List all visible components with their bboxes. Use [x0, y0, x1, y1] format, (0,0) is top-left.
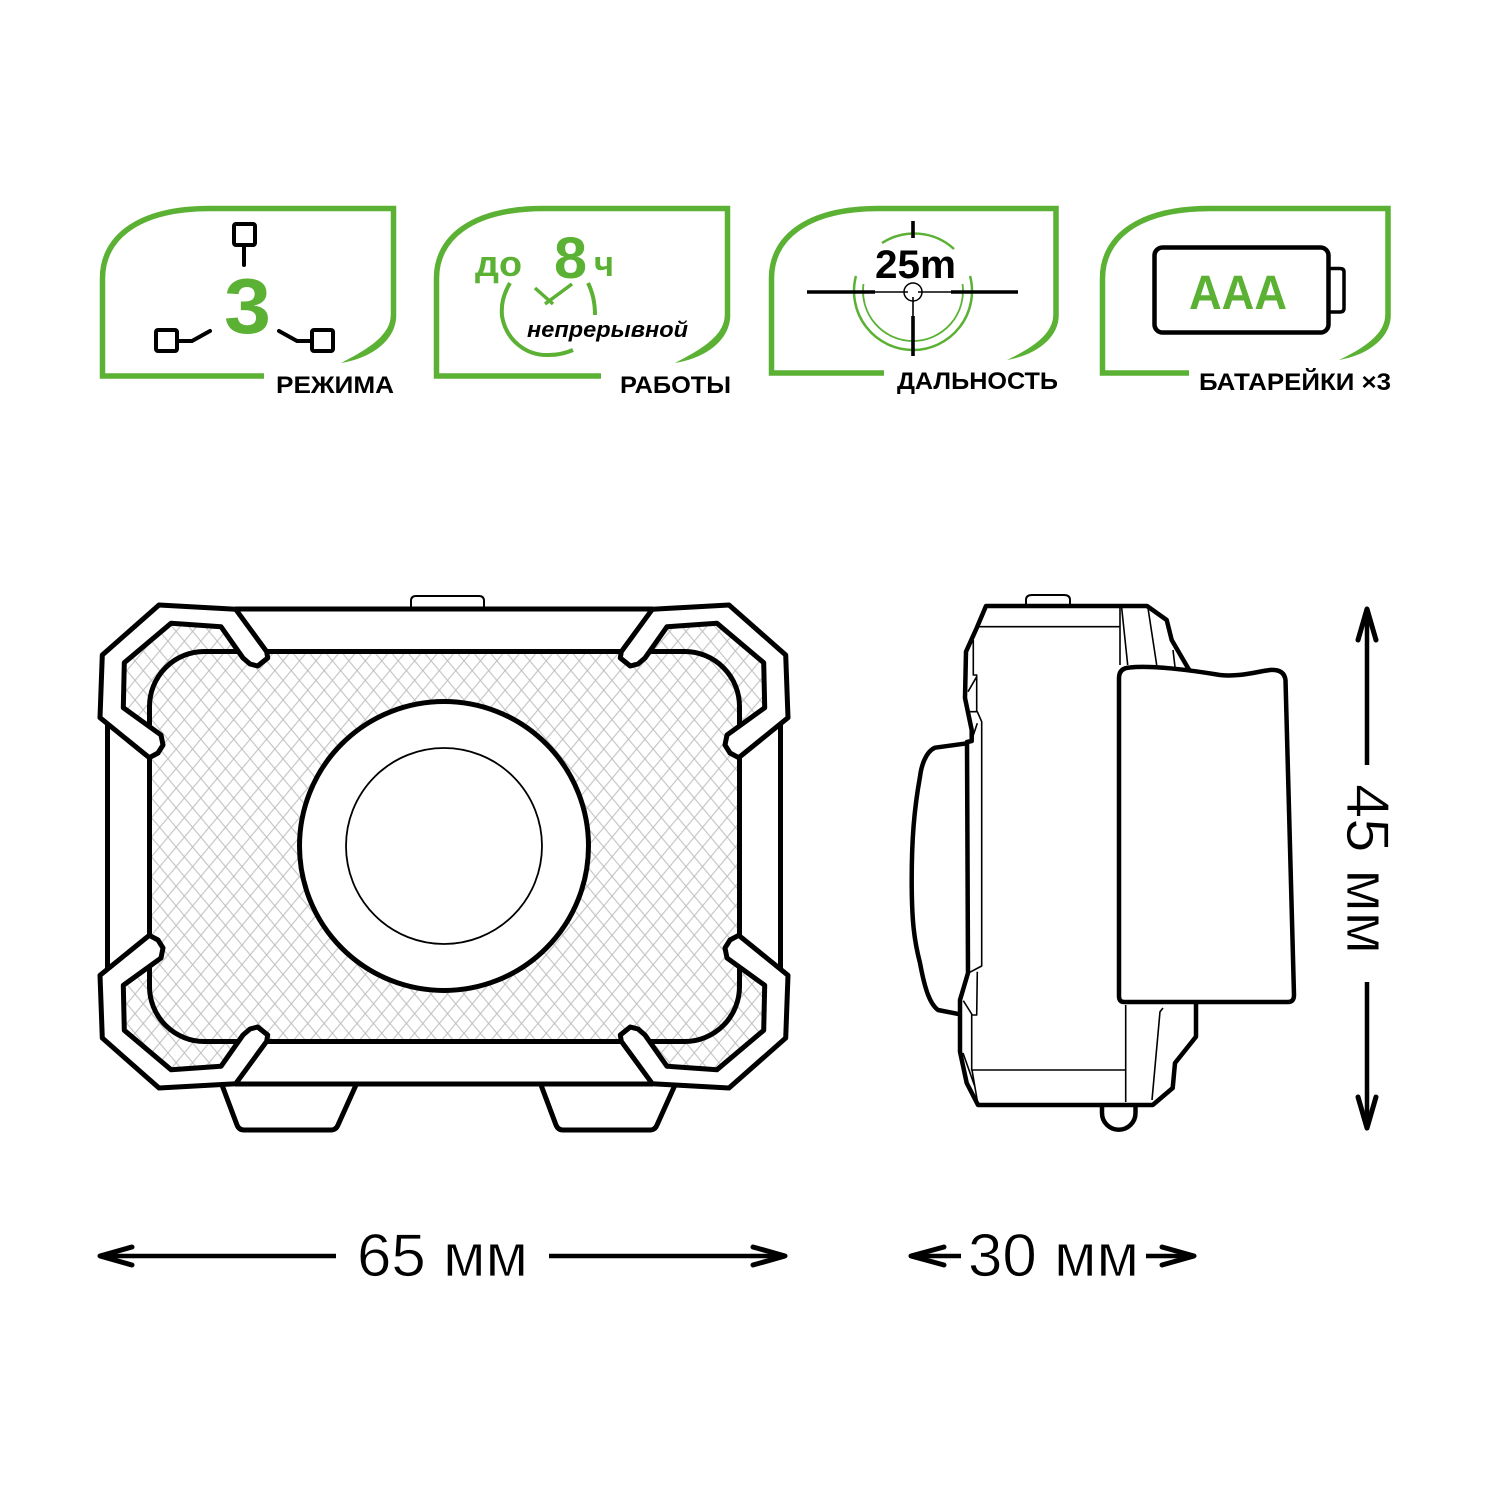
side view of headlamp — [912, 595, 1294, 1130]
text: up to: до — [475, 243, 522, 284]
label: runtime: РАБОТЫ — [620, 372, 731, 399]
panel frame: modes — [102, 208, 394, 376]
label: batteries x3: БАТАРЕЙКИ ×3 — [1199, 368, 1391, 396]
frame tail: batteries — [1339, 315, 1391, 360]
number: 3: 3 — [224, 262, 271, 350]
icon: mode switch top — [234, 224, 255, 265]
arrow down — [1358, 982, 1376, 1131]
panel frame: runtime — [436, 208, 728, 376]
mesh grille — [123, 623, 765, 1070]
panel: range — [772, 208, 1059, 395]
icon: crosshair target — [807, 221, 1018, 356]
panel frame: range — [772, 208, 1056, 373]
corner strap bottom left — [100, 935, 268, 1088]
hook bottom — [1102, 1105, 1136, 1130]
corner strap bottom right — [620, 935, 788, 1088]
arrow up — [1358, 606, 1376, 765]
lens — [346, 748, 542, 944]
arrow right — [549, 1247, 788, 1265]
icon: clock — [502, 283, 595, 355]
number: 8: 8 — [554, 226, 587, 291]
foot right — [541, 1085, 675, 1130]
text: AAA: AAA — [1189, 267, 1287, 320]
value 65 mm: 65 мм — [357, 1222, 528, 1289]
dimension: width 65 mm — [97, 1222, 788, 1289]
icon: mode switch left — [156, 330, 210, 351]
strap band side — [1119, 667, 1294, 1002]
foot left — [222, 1085, 356, 1130]
value 30 mm: 30 мм — [968, 1222, 1139, 1289]
panel: batteries — [1102, 208, 1391, 396]
frame tail: range — [1007, 315, 1059, 360]
button top — [411, 596, 484, 608]
label: modes: РЕЖИМА — [276, 372, 394, 399]
text: 25m: 25m — [875, 243, 956, 287]
panel: 3 modes — [102, 208, 396, 399]
icon: mode switch right — [279, 330, 333, 351]
arrow right — [1146, 1247, 1197, 1265]
arrow left — [908, 1247, 961, 1265]
frame tail: runtime — [675, 315, 730, 363]
dimension: height 45 mm — [1334, 606, 1401, 1131]
value 45 mm: 45 мм — [1334, 784, 1401, 954]
dimension: depth 30 mm — [908, 1222, 1197, 1289]
side body outline — [960, 606, 1196, 1105]
dome lens side — [912, 743, 972, 1014]
label: range: ДАЛЬНОСТЬ — [897, 368, 1058, 395]
lens bezel — [300, 702, 588, 990]
faceplate outline — [150, 652, 740, 1042]
frame tail: modes — [341, 315, 396, 363]
corner strap top right — [620, 605, 788, 758]
side body inner detail lines — [963, 607, 1175, 1103]
text: continuous: непрерывной — [527, 317, 689, 342]
text: hours: ч — [594, 243, 614, 284]
button top side — [1026, 595, 1070, 604]
corner strap top left — [100, 605, 268, 758]
front view of headlamp — [100, 596, 788, 1130]
panel: runtime — [436, 208, 731, 399]
housing — [108, 609, 780, 1084]
arrow left — [97, 1247, 336, 1265]
icon: battery — [1154, 248, 1344, 332]
panel frame: batteries — [1102, 208, 1388, 373]
